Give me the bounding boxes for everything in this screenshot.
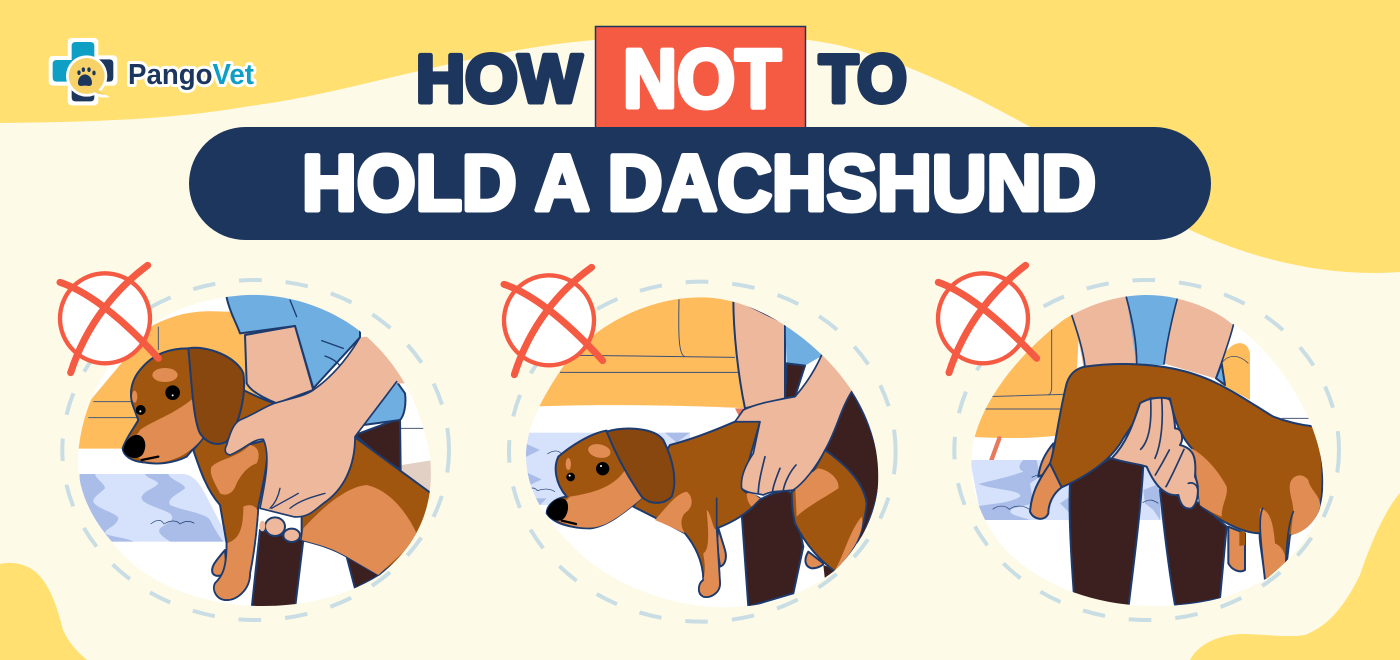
title banner xyxy=(189,127,1211,240)
title: NOT box xyxy=(596,26,806,128)
title: HOLD A DACHSHUND: HOLD A DACHSHUND xyxy=(302,138,1096,227)
background blob: bottom right xyxy=(1190,493,1400,660)
icon: prohibited X xyxy=(504,267,603,375)
dashed ring xyxy=(62,280,449,620)
icon: prohibited X xyxy=(938,265,1037,373)
icon: prohibited X xyxy=(60,265,158,373)
title: NOT word: NOT xyxy=(623,32,781,125)
panel: hold 3 xyxy=(938,265,1339,620)
panel: hold 1 xyxy=(60,265,449,620)
logo: PangoVet xyxy=(53,42,254,101)
title: HOW: HOW xyxy=(416,41,583,117)
title: TO: TO xyxy=(819,41,907,117)
background blob: top yellow xyxy=(0,0,1400,273)
dashed ring xyxy=(954,280,1339,620)
logo wordmark: PangoVet xyxy=(128,59,254,91)
icon: medical cross with paw xyxy=(53,42,113,101)
dashed ring xyxy=(509,282,896,622)
illustration: person gripping dog by the shoulders xyxy=(526,297,878,608)
illustration: person supporting chest only xyxy=(78,294,431,606)
background blob: bottom left xyxy=(0,563,87,660)
panel: hold 2 xyxy=(504,267,896,622)
illustration: person holding dog mid-belly with one hand xyxy=(972,295,1324,606)
